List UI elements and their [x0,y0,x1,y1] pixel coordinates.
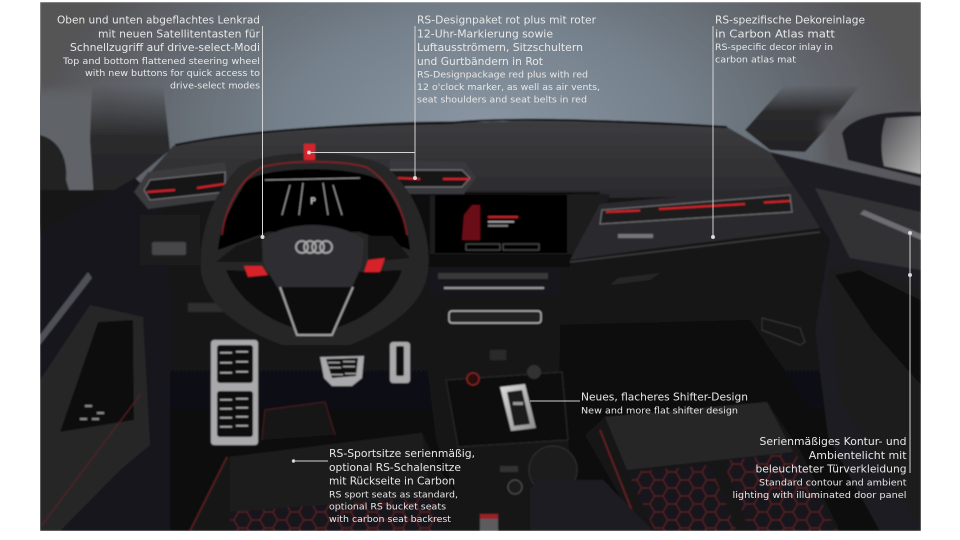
callout: ambient lighting: Serienmäßiges Kontur- und [760,436,906,448]
callout: steering wheel: Oben und unten abgeflachtes Lenkrad [57,14,260,26]
glove box lower dash [569,230,820,284]
centre console [420,305,578,531]
callout: steering wheel: Top and bottom flattened steering wheel [62,57,260,67]
leader: steering wheel [261,26,264,238]
seat belt clip [480,514,498,531]
centre air vent [389,168,475,196]
sky background seen through windshield [40,2,921,187]
callout: ambient lighting [732,436,907,501]
left side window area [40,85,93,234]
callout: steering wheel: drive-select modes [170,82,260,92]
leader: decor inlay [712,26,714,238]
steering wheel: P [310,197,316,207]
driver display [265,178,360,215]
right spoke buttons [368,236,410,262]
lower cabin base [40,190,831,531]
callout: sport seats: optional RS-Schalensitze [329,462,461,474]
leader: ambient light [908,232,912,473]
callout: steering wheel [57,14,261,92]
right door [762,152,921,531]
callout: shifter: Neues, flacheres Shifter-Design [581,392,748,404]
callout: steering wheel: with new buttons for quick access to [85,69,260,79]
accelerator pedal [390,342,410,383]
right side window [822,100,940,190]
callout: steering wheel: mit neuen Satellitentasten für [98,28,261,40]
callout: decor inlay: in Carbon Atlas matt [715,28,835,40]
lower wheel openings [226,270,402,328]
callout: decor inlay: carbon atlas mat [715,56,797,66]
footwell right [560,320,880,531]
Audi rings [296,241,332,253]
callout: sport seats [329,448,475,525]
callout: decor inlay: RS-spezifische Dekoreinlage [715,14,865,26]
hub [262,225,364,292]
callout: RS design package: 12 o'clock marker, as well as air vents, [417,83,600,93]
callout: RS design package [417,14,600,106]
infotainment screen [430,194,610,254]
callout: decor inlay [715,14,865,66]
red satellite buttons [244,266,268,277]
callout: RS design package: 12-Uhr-Markierung sowie [417,28,553,40]
callout: RS design package: RS-Designpaket rot plus mit roter [417,14,597,26]
callout: ambient lighting: beleuchteter Türverkleidung [756,464,906,476]
callout: sport seats: RS sport seats as standard, [329,490,458,500]
climate controls [437,272,549,290]
callout: shifter [581,392,748,416]
left side mirror [40,134,70,191]
callout: RS design package: seat shoulders and seat belts in red [417,96,587,106]
dashboard top [135,120,815,200]
gear shifter [500,384,536,431]
steering wheel [201,144,429,345]
callout: ambient lighting: Ambientelicht mit [809,450,906,462]
centre dash panel [410,192,600,267]
armrest [530,480,653,531]
left switch panel [150,240,188,256]
callout: RS design package: Luftausströmern, Sitzschultern [417,42,583,54]
left A-pillar [90,92,171,191]
leader lines [261,26,912,473]
callout: steering wheel: Schnellzugriff auf drive-select-Modi [70,42,260,54]
callout: RS design package: und Gurtbändern in Rot [417,56,543,68]
callout: decor inlay: RS-specific decor inlay in [715,43,833,53]
callout: RS design package: RS-Designpackage red plus with red [417,70,588,80]
windshield base line [175,120,727,145]
callout: ambient lighting: lighting with illuminated door panel [732,491,906,501]
right A-pillar [745,85,860,152]
left air vent [134,162,232,209]
right side mirror [842,112,921,178]
leader: RS design package [308,26,416,180]
leader: seats [292,460,328,462]
footrest [211,340,258,445]
lower dash vent under wheel [188,303,223,312]
callout: shifter: New and more flat shifter design [581,406,738,416]
passenger seat [585,402,840,531]
callout: sport seats: mit Rückseite in Carbon [329,476,455,488]
leader: shifter [530,400,580,402]
callout: sport seats: with carbon seat backrest [329,515,452,525]
driver seat [190,433,480,531]
brake pedal [320,356,364,386]
lower spoke frame [280,287,353,335]
callout: sport seats: RS-Sportsitze serienmäßig, [329,448,475,460]
left spoke buttons [216,236,262,262]
callout: sport seats: optional RS bucket seats [329,502,446,512]
left door and dash side [40,178,170,531]
decor inlay panel [570,186,820,260]
12 o'clock marker [304,144,315,160]
floor mat stitch [262,402,335,440]
callout: ambient lighting: Standard contour and ambient [759,478,907,488]
